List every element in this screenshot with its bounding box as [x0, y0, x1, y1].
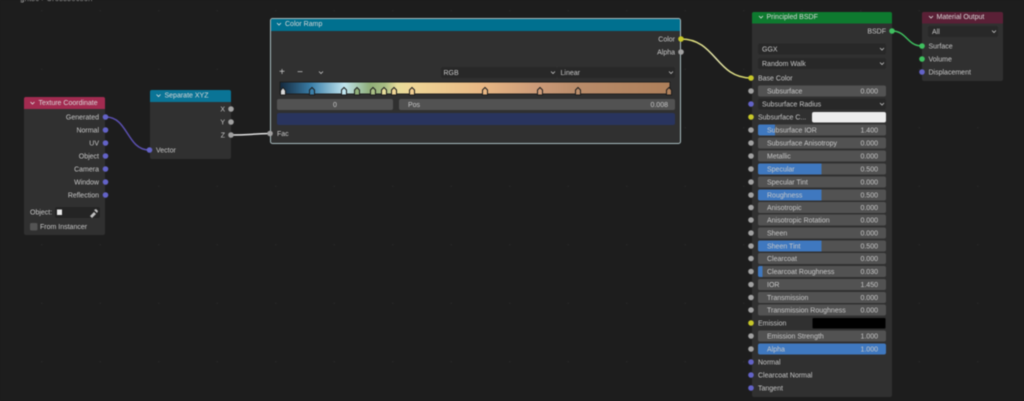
- Sheen input: 0.000: [860, 230, 878, 238]
- Transmission Roughness input: [748, 304, 886, 316]
- Roughness input: 0.500: [860, 192, 878, 200]
- Object field: Object:: [30, 210, 52, 216]
- position field: 0.008: [650, 102, 668, 109]
- Transmission Roughness input: 0.000: [860, 308, 878, 314]
- Separate XYZ outputs: X: [220, 106, 225, 114]
- Color Ramp outputs: Color: [658, 36, 676, 44]
- Separate XYZ input: Vector: Vector: [156, 148, 177, 154]
- Color Ramp outputs: [657, 36, 684, 56]
- Color Ramp header: [271, 19, 680, 31]
- Tangent input: Tangent: [758, 386, 783, 392]
- add, remove and menu buttons: +: [279, 67, 285, 78]
- add, remove and menu buttons: −: [297, 67, 303, 78]
- BSDF output: BSDF: [867, 28, 886, 36]
- Subsurface Anisotropy input: 0.000: [860, 140, 878, 148]
- Base Color input: Base Color: [758, 76, 793, 82]
- Texture Coordinate outputs: UV: [89, 140, 99, 148]
- gradient stop handles: [280, 88, 672, 95]
- Clearcoat input: 0.000: [860, 256, 878, 263]
- Subsurface input: 0.000: [860, 88, 878, 96]
- Separate XYZ header: [150, 90, 231, 102]
- color mode dropdown RGB: RGB: [444, 70, 459, 77]
- distribution dropdown GGX: GGX: [762, 46, 778, 54]
- Principled BSDF header: [752, 12, 892, 24]
- Texture Coordinate header: [24, 97, 105, 109]
- Sheen Tint input: [748, 240, 886, 252]
- target dropdown All: All: [932, 29, 940, 36]
- Separate XYZ collapse arrow: [156, 94, 160, 96]
- Anisotropic input: [748, 202, 886, 213]
- Texture Coordinate title: Texture Coordinate: [38, 100, 98, 107]
- position field: Pos: [408, 102, 421, 109]
- Anisotropic Rotation input: 0.000: [860, 218, 878, 224]
- Clearcoat input: Clearcoat: [767, 256, 797, 263]
- Metallic input: 0.000: [860, 154, 878, 160]
- Texture Coordinate outputs: Object: [79, 154, 99, 160]
- Normal input: Normal: [758, 360, 781, 366]
- Texture Coordinate outputs: Normal: [76, 128, 99, 134]
- color mode dropdown RGB: [441, 67, 557, 78]
- Clearcoat input: [748, 253, 886, 264]
- Texture Coordinate outputs: Window: [74, 180, 100, 186]
- Emission input: [748, 318, 886, 328]
- Subsurface input: Subsurface: [767, 88, 803, 96]
- Material Output header: [922, 12, 1003, 24]
- connection: Color to Base Color: [681, 39, 751, 78]
- Sheen Tint input: 0.500: [860, 244, 878, 250]
- Surface input: Surface: [928, 44, 953, 50]
- Emission input: Emission: [758, 320, 787, 328]
- Anisotropic Rotation input: Anisotropic Rotation: [767, 218, 830, 224]
- Transmission input: [748, 292, 886, 303]
- IOR input: [748, 279, 886, 290]
- subsurface method dropdown Random Walk: [758, 58, 886, 69]
- Anisotropic input: 0.000: [860, 205, 878, 212]
- Subsurface Radius input: Subsurface Radius: [762, 102, 822, 108]
- Emission Strength input: 1.000: [860, 334, 878, 340]
- Sheen input: [748, 228, 886, 238]
- Clearcoat Roughness input: 0.030: [860, 269, 878, 276]
- subsurface method dropdown Random Walk: Random Walk: [762, 61, 806, 68]
- Alpha input: Alpha: [767, 346, 785, 354]
- Subsurface Radius input: [748, 98, 886, 110]
- connection: Z to Fac: [231, 134, 270, 135]
- Subsurface Color input: Subsurface C...: [758, 114, 806, 122]
- node: Color Ramp: [267, 18, 684, 144]
- connection: Generated to Vector: [106, 117, 149, 150]
- Transmission Roughness input: Transmission Roughness: [767, 308, 846, 314]
- Volume input: Volume: [928, 56, 952, 64]
- Alpha input: 1.000: [860, 346, 878, 354]
- Clearcoat Roughness input: [748, 266, 886, 277]
- Texture Coordinate outputs: Reflection: [68, 192, 99, 200]
- active stop index field: 0: [333, 102, 337, 109]
- Texture Coordinate outputs: Camera: [74, 166, 99, 174]
- Subsurface Color input: [748, 112, 886, 122]
- Sheen input: Sheen: [767, 230, 787, 238]
- Subsurface IOR input: Subsurface IOR: [767, 128, 817, 134]
- Subsurface Anisotropy input: Subsurface Anisotropy: [767, 140, 838, 148]
- active stop index field: [277, 99, 393, 110]
- From Instancer checkbox: From Instancer: [40, 224, 88, 231]
- Color Ramp title: Color Ramp: [285, 21, 322, 28]
- Roughness input: [748, 190, 886, 200]
- Tangent input: [748, 385, 783, 392]
- Color Ramp outputs: Alpha: [657, 50, 675, 56]
- Specular input: 0.500: [860, 166, 878, 174]
- Emission Strength input: Emission Strength: [767, 334, 824, 340]
- gradient color band: [280, 82, 670, 94]
- Transmission input: Transmission: [767, 295, 808, 302]
- Separate XYZ outputs: Y: [220, 120, 225, 126]
- Roughness input: Roughness: [767, 192, 803, 200]
- stop color swatch: [277, 113, 675, 125]
- interpolation dropdown Linear: Linear: [560, 70, 581, 77]
- IOR input: IOR: [767, 282, 779, 289]
- Material Output collapse arrow: [929, 16, 933, 18]
- Color Ramp input: Fac: Fac: [277, 131, 289, 138]
- Specular Tint input: 0.000: [860, 180, 878, 186]
- node: Texture Coordinate: [24, 97, 108, 235]
- Displacement input: Displacement: [928, 70, 971, 76]
- Subsurface input: [748, 86, 886, 96]
- BSDF output: [867, 28, 895, 36]
- Alpha input: [748, 344, 886, 354]
- Subsurface IOR input: [748, 124, 886, 136]
- node: Separate XYZ: [147, 90, 234, 159]
- interpolation dropdown Linear: [557, 67, 675, 78]
- Anisotropic input: Anisotropic: [767, 205, 802, 212]
- Anisotropic Rotation input: [748, 214, 886, 226]
- Specular Tint input: [748, 176, 886, 188]
- distribution dropdown GGX: [758, 44, 886, 54]
- Material Output title: Material Output: [936, 14, 984, 21]
- Principled BSDF collapse arrow: [759, 16, 763, 18]
- Specular Tint input: Specular Tint: [767, 180, 808, 186]
- Metallic input: Metallic: [767, 154, 791, 160]
- Subsurface IOR input: 1.400: [860, 128, 878, 134]
- Clearcoat Normal input: Clearcoat Normal: [758, 372, 813, 380]
- add, remove and menu buttons: [279, 67, 323, 78]
- Color Ramp collapse arrow: [277, 23, 281, 25]
- connection: BSDF to Surface: [892, 31, 922, 46]
- Separate XYZ title: Separate XYZ: [164, 92, 209, 100]
- Transmission input: 0.000: [860, 295, 878, 302]
- Emission Strength input: [748, 330, 886, 342]
- Separate XYZ outputs: Z: [221, 132, 226, 140]
- Color Ramp input: Fac: [267, 131, 289, 138]
- Specular input: Specular: [767, 166, 795, 174]
- Metallic input: [748, 150, 886, 162]
- Texture Coordinate collapse arrow: [30, 102, 34, 104]
- Texture Coordinate outputs: [66, 114, 108, 200]
- Separate XYZ outputs: [220, 106, 234, 140]
- Sheen Tint input: Sheen Tint: [767, 244, 801, 250]
- Texture Coordinate outputs: Generated: [66, 114, 99, 122]
- Specular input: [748, 164, 886, 174]
- Clearcoat Roughness input: Clearcoat Roughness: [767, 269, 835, 276]
- node: Material Output: [919, 12, 1003, 81]
- Principled BSDF title: Principled BSDF: [766, 14, 818, 21]
- Subsurface Anisotropy input: [748, 138, 886, 148]
- Normal input: [748, 359, 781, 366]
- IOR input: 1.450: [860, 282, 878, 289]
- node: Principled BSDF: [748, 12, 895, 397]
- position field: [399, 99, 675, 110]
